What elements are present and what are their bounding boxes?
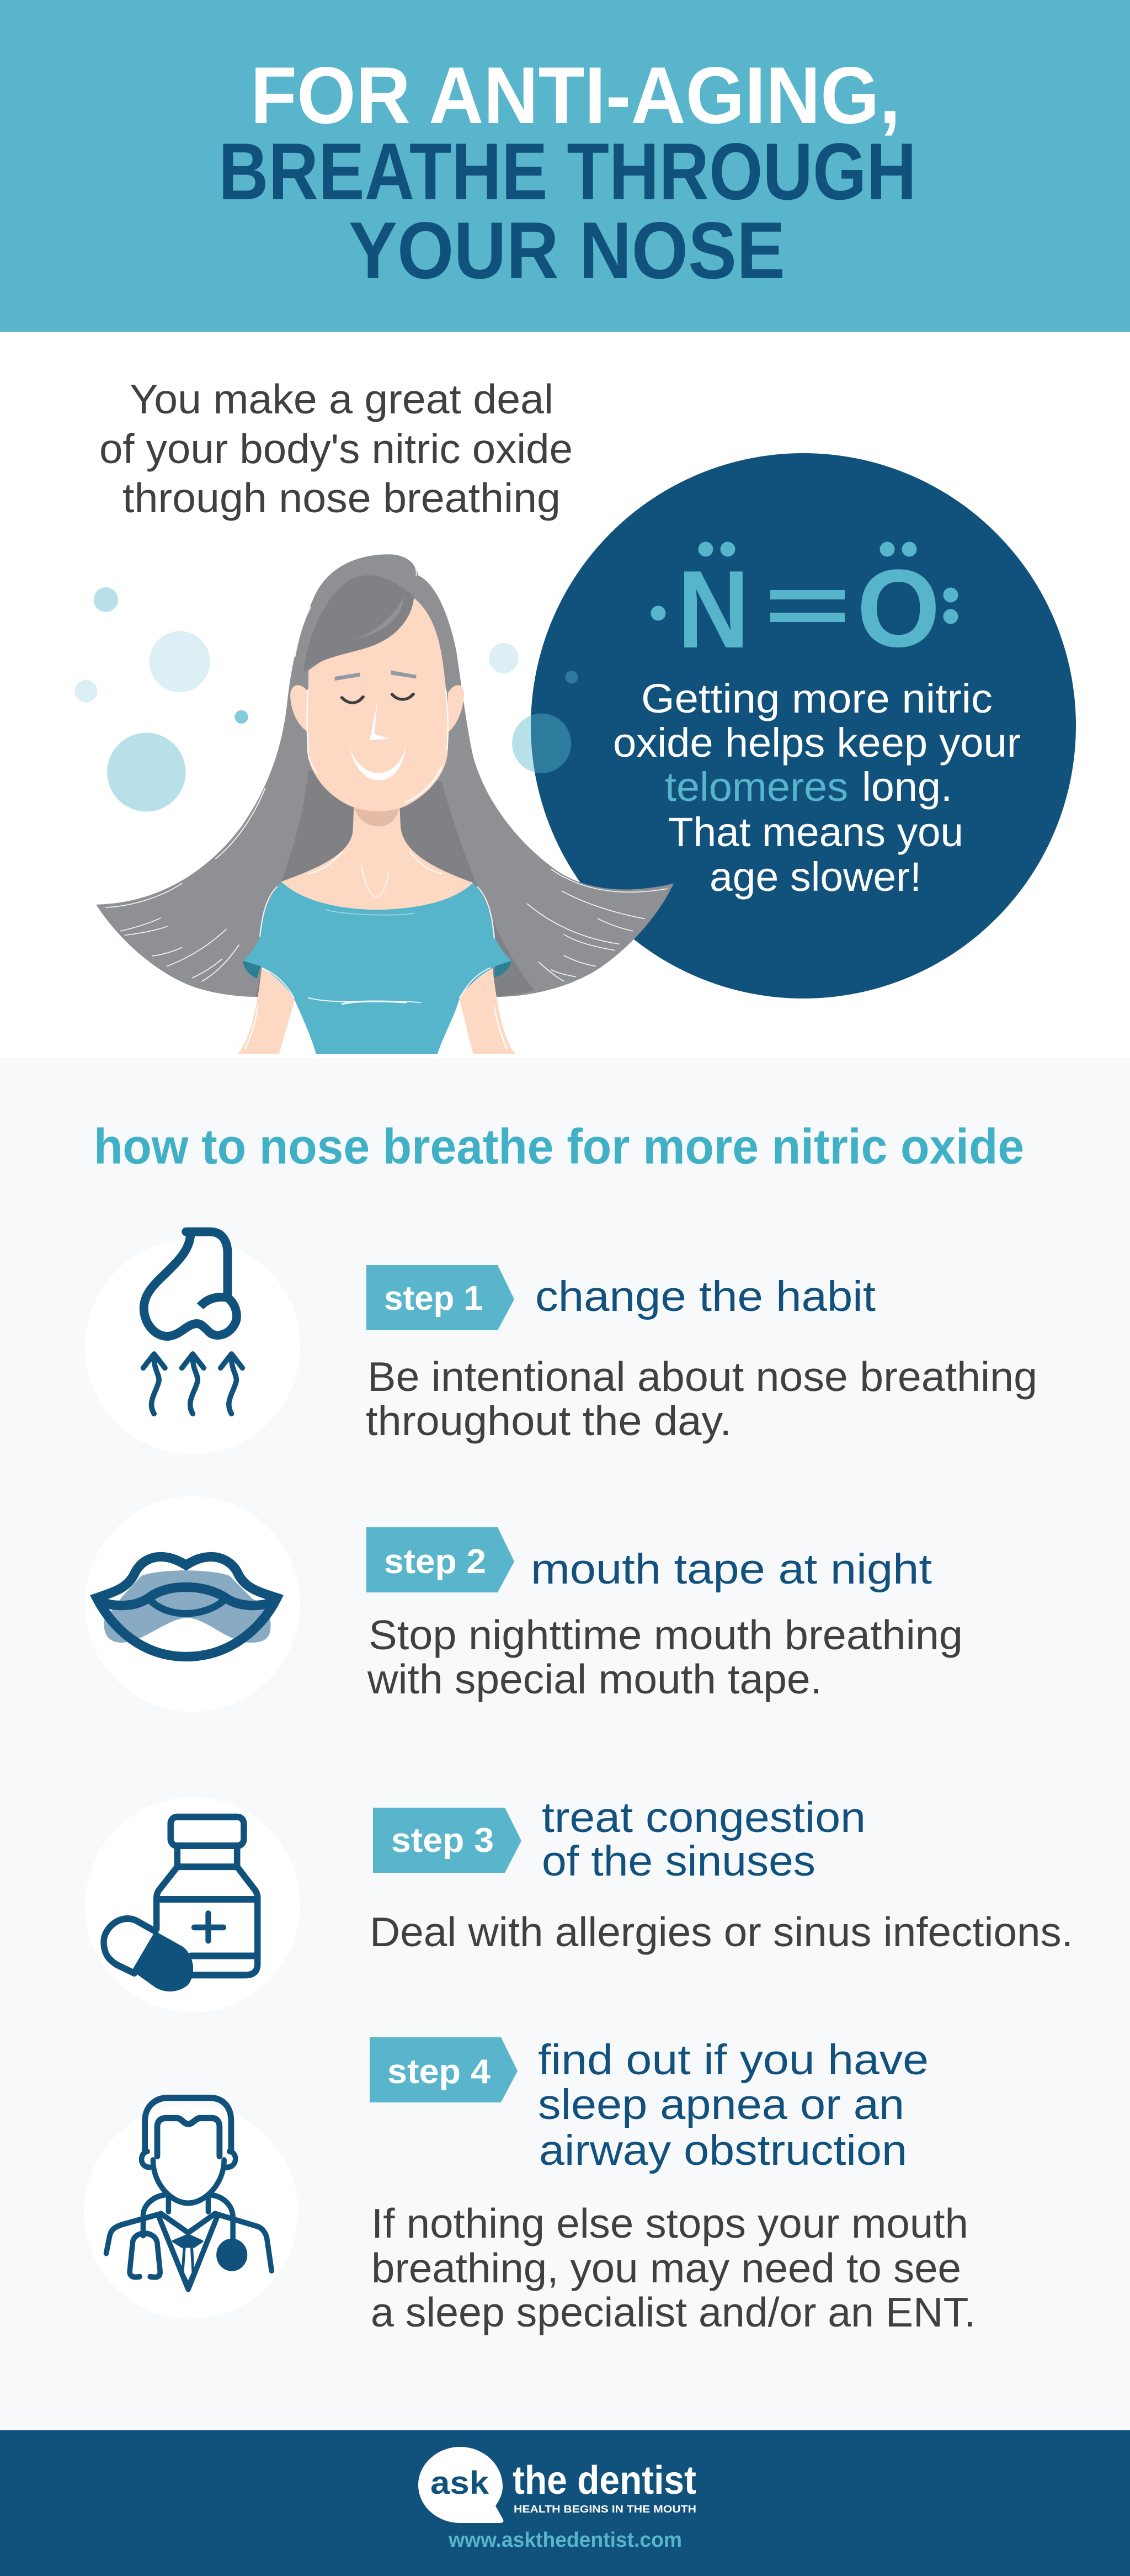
intro text: of your body's nitric oxide (99, 426, 573, 472)
logo (418, 2447, 696, 2523)
nose (370, 702, 390, 740)
website: www.askthedentist.com (448, 2529, 682, 2552)
telomeres text: oxide helps keep your (613, 720, 1021, 766)
sleeve undersides (243, 961, 511, 979)
footer (0, 2430, 1130, 2576)
step 4 text (371, 2200, 976, 2335)
step 1 (85, 1232, 1037, 1454)
step 1 text: Be intentional about nose breathing (367, 1353, 1037, 1400)
face (307, 597, 448, 811)
step 4 heading: airway obstruction (539, 2127, 907, 2174)
step 4 heading (538, 2036, 929, 2174)
step 4 text: breathing, you may need to see (371, 2245, 961, 2291)
step 3 badge (373, 1808, 521, 1873)
neck (281, 799, 473, 912)
step 4 heading: find out if you have (538, 2036, 929, 2084)
hair (96, 554, 674, 997)
step 1 heading: change the habit (535, 1273, 876, 1320)
step 3 heading (542, 1794, 866, 1885)
step 4 (84, 2036, 976, 2335)
shirt (243, 881, 511, 1054)
ears (290, 685, 464, 732)
telomeres text: Getting more nitric (641, 676, 993, 721)
step 4 heading: sleep apnea or an (538, 2081, 904, 2128)
step 2 badge: step 2 (384, 1543, 486, 1581)
nitric oxide Lewis formula (651, 542, 958, 671)
step 3 heading: treat congestion (542, 1794, 866, 1841)
step 3 (85, 1794, 1073, 2012)
panel: nitric oxide circle (531, 453, 1076, 998)
logo: the dentist (513, 2458, 696, 2503)
header banner (0, 0, 1130, 332)
bangs (303, 575, 414, 674)
step 2 text (367, 1612, 963, 1702)
step 2 (85, 1496, 963, 1712)
eyebrows (335, 671, 416, 681)
telomeres text: That means you (668, 809, 963, 855)
step 3 heading: of the sinuses (542, 1837, 815, 1885)
illustration: woman with long gray hair (96, 554, 674, 1054)
title (218, 50, 916, 295)
icon: nose with air arrows (85, 1232, 300, 1454)
step 4 badge: step 4 (387, 2053, 491, 2091)
step 3 badge: step 3 (391, 1821, 494, 1860)
step 4 badge (370, 2037, 518, 2102)
logo: HEALTH BEGINS IN THE MOUTH (514, 2504, 696, 2515)
bubbles (74, 587, 578, 811)
step 1 text: throughout the day. (366, 1398, 732, 1444)
nitric oxide Lewis formula: O (857, 547, 940, 670)
title: BREATHE THROUGH (218, 126, 916, 216)
step 4 text: If nothing else stops your mouth (371, 2200, 968, 2246)
step 2 text: Stop nighttime mouth breathing (369, 1612, 963, 1658)
hair highlights (106, 557, 668, 981)
telomeres text: age slower! (710, 854, 921, 900)
intro text (99, 376, 573, 521)
logo: ask (430, 2465, 489, 2501)
arms (238, 964, 515, 1054)
icon: doctor with stethoscope (84, 2098, 298, 2319)
step 1 badge (366, 1265, 514, 1330)
title: FOR ANTI-AGING, (250, 50, 900, 140)
telomeres text (613, 676, 1021, 900)
step 2 heading: mouth tape at night (531, 1545, 932, 1593)
step 2 text: with special mouth tape. (367, 1656, 822, 1702)
neck shadow (354, 806, 399, 826)
step 3 text: Deal with allergies or sinus infections. (370, 1909, 1073, 1955)
intro text: through nose breathing (122, 475, 561, 521)
icon: taped lips (85, 1496, 300, 1712)
closed eyes (342, 694, 413, 703)
hair shadow (256, 771, 535, 997)
step 2 badge (366, 1527, 514, 1592)
telomeres text: telomeres (665, 764, 848, 810)
step 1 badge: step 1 (384, 1279, 483, 1318)
intro text: You make a great deal (130, 376, 553, 422)
step 4 text: a sleep specialist and/or an ENT. (371, 2289, 976, 2335)
nitric oxide Lewis formula: N (678, 548, 749, 671)
step 1 text (366, 1353, 1037, 1444)
section heading: how to nose breathe for more nitric oxide (94, 1119, 1024, 1175)
icon: medicine bottle and pill (85, 1797, 300, 2012)
skin highlights (245, 690, 507, 1049)
telomeres text: long. (862, 764, 952, 810)
title: YOUR NOSE (349, 205, 785, 295)
smile (349, 746, 406, 780)
shirt highlights (260, 887, 494, 1004)
